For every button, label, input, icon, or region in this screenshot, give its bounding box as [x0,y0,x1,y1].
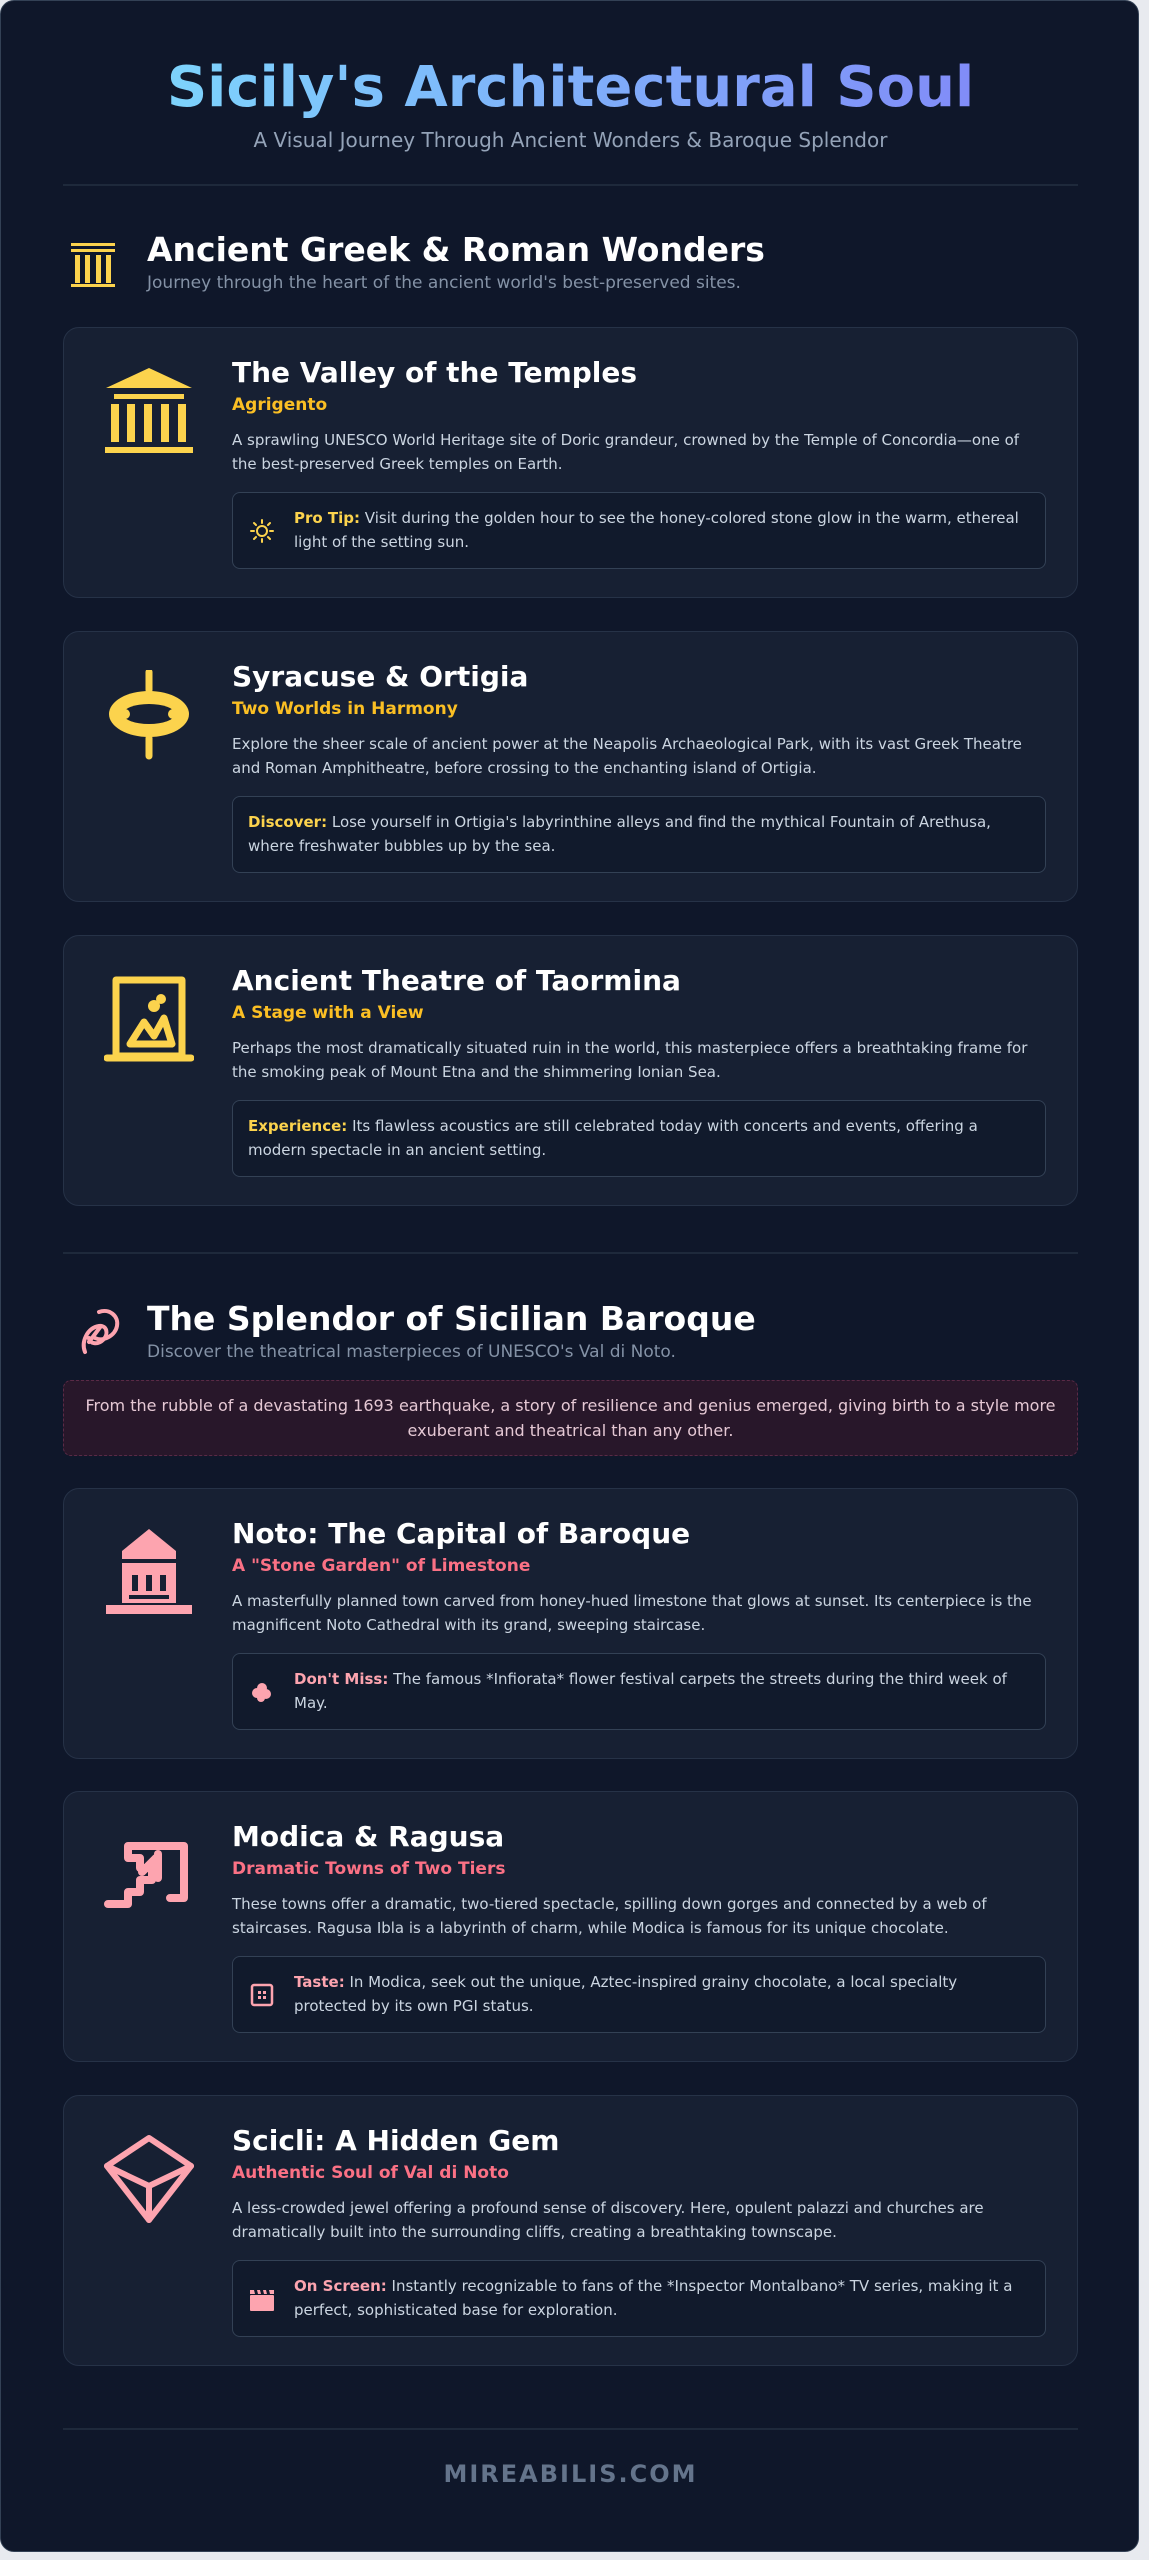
section heading: Discover the theatrical masterpieces of UNESCO's Val di Noto. [147,1342,676,1362]
icon: ring [109,670,189,760]
tip box: On Screen: Instantly recognizable to fans of the *Inspector Montalbano* TV series, making it a perfect, sophisticated base for exploration. [294,2277,1012,2319]
section header: ancient [71,230,765,293]
card: modica [63,1791,1078,2062]
card: scicli: Authentic Soul of Val di Noto [232,2163,509,2183]
card: valley of the temples: A sprawling UNESCO World Heritage site of Doric grandeur, crowned by the Temple of Concordia—one of the best-preserved Greek temples on Earth. [232,431,1019,473]
card: modica: These towns offer a dramatic, two-tiered spectacle, spilling down gorges and connected by a web of staircases. Ragusa Ibla is a labyrinth of charm, while Modica is famous for its unique chocolate. [232,1895,987,1937]
icon: flower [252,1683,271,1702]
tip box [232,1653,1046,1730]
section heading [147,1299,756,1362]
icon: baroque swirl [82,1309,120,1354]
subtitle: A Visual Journey Through Ancient Wonders & Baroque Splendor [254,128,887,152]
section header: baroque [82,1299,756,1362]
section heading: Journey through the heart of the ancient world's best-preserved sites. [147,273,741,293]
title: Sicily's Architectural Soul [167,55,974,120]
tip box: Experience: Its flawless acoustics are still celebrated today with concerts and events, offering a modern spectacle in an ancient setting. [248,1117,978,1159]
tip box [232,1100,1046,1177]
icon: temple [105,368,193,453]
card: modica: Modica & Ragusa [232,1820,504,1853]
tip box: Taste: In Modica, seek out the unique, Aztec-inspired grainy chocolate, a local specialty protected by its own PGI status. [294,1973,957,2015]
icon: chocolate [250,1984,274,2006]
tip box [232,2260,1046,2337]
card: noto [63,1488,1078,1759]
card: modica: Dramatic Towns of Two Tiers [232,1859,505,1879]
section heading: The Splendor of Sicilian Baroque [147,1299,756,1338]
card: scicli [63,2095,1078,2366]
card: syracuse [63,631,1078,902]
tip box: Discover: Lose yourself in Ortigia's labyrinthine alleys and find the mythical Fountain of Arethusa, where freshwater bubbles up by the sea. [248,813,991,855]
tip box [232,796,1046,873]
icon: sun [250,519,274,543]
icon: clapperboard [250,2290,274,2311]
card: noto: A masterfully planned town carved from honey-hued limestone that glows at sunset. Its centerpiece is the magnificent Noto Cathedral with its grand, sweeping staircase. [232,1592,1032,1634]
card: valley of the temples: Agrigento [232,395,327,415]
card: noto: A "Stone Garden" of Limestone [232,1556,530,1576]
card: taormina: Perhaps the most dramatically situated ruin in the world, this masterpiece offers a breathtaking frame for the smoking peak of Mount Etna and the shimmering Ionian Sea. [232,1039,1027,1081]
icon: framed picture [104,976,194,1062]
card: valley of the temples [63,327,1078,598]
tip box [232,1956,1046,2033]
card: valley of the temples: The Valley of the Temples [232,356,637,389]
card: syracuse: Explore the sheer scale of ancient power at the Neapolis Archaeological Park, with its vast Greek Theatre and Roman Amphitheatre, before crossing to the enchanting island of Ortigia. [232,735,1022,777]
card: taormina: A Stage with a View [232,1003,424,1023]
card: syracuse: Syracuse & Ortigia [232,660,528,693]
icon: cathedral [106,1529,192,1614]
card: taormina: Ancient Theatre of Taormina [232,964,681,997]
section heading [146,230,765,293]
tip box: Pro Tip: Visit during the golden hour to see the honey-colored stone glow in the warm, ethereal light of the setting sun. [294,509,1019,551]
callout: earthquake [63,1380,1078,1456]
tip box: Don't Miss: The famous *Infiorata* flower festival carpets the streets during the third week of May. [294,1670,1007,1712]
callout: earthquake: From the rubble of a devastating 1693 earthquake, a story of resilience and genius emerged, giving birth to a style more exuberant and theatrical than any other. [85,1396,1056,1440]
icon: stairs [104,1842,188,1908]
card: scicli: A less-crowded jewel offering a profound sense of discovery. Here, opulent palazzi and churches are dramatically built into the surrounding cliffs, creating a breathtaking townscape. [232,2199,984,2241]
card: taormina [63,935,1078,1206]
card: scicli: Scicli: A Hidden Gem [232,2124,559,2157]
section heading: Ancient Greek & Roman Wonders [147,230,765,269]
tip box [232,492,1046,569]
icon: gem [104,2135,194,2223]
footer: MIREABILIS.COM [443,2460,698,2488]
card: syracuse: Two Worlds in Harmony [232,699,458,719]
card: noto: Noto: The Capital of Baroque [232,1517,690,1550]
icon: columns [71,243,115,287]
